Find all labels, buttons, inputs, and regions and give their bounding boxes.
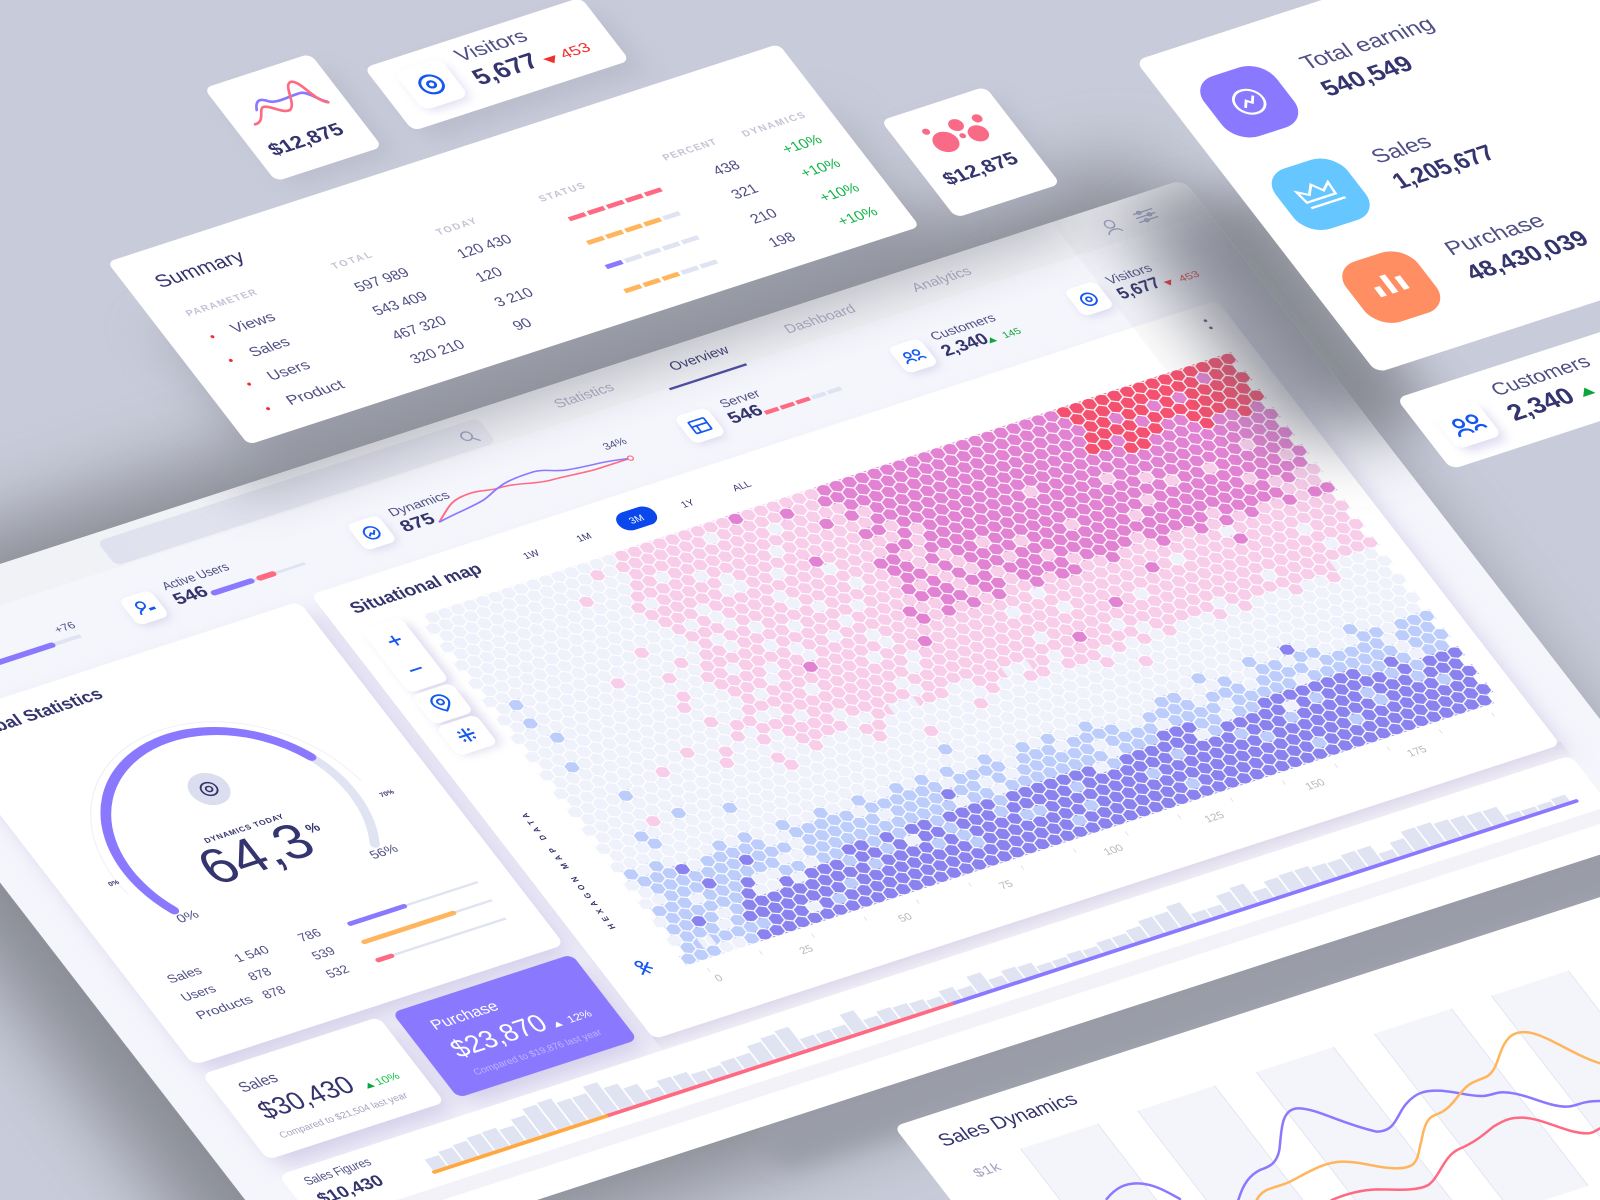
hexagon outlines: [412, 348, 1505, 970]
value: $12,875: [264, 120, 349, 160]
statistics table: 532: [322, 962, 352, 981]
x axis: 100: [1101, 843, 1126, 858]
dynamics column: +10%: [816, 180, 863, 206]
hex layer: pale holes: [617, 376, 1352, 753]
widget: progress stub: +76: [52, 620, 78, 636]
parameter column: Views: [227, 309, 279, 337]
hex layer: magenta holes in red: [1103, 376, 1224, 429]
shadow under top cards: [226, 0, 1073, 392]
table headers: [183, 109, 809, 320]
card: customers: [1396, 246, 1600, 470]
navigation tabs: Statistics: [550, 380, 617, 411]
widget: customers: 145: [1000, 326, 1024, 341]
gauge icon: [179, 768, 239, 810]
visitors icon tile: [401, 62, 472, 113]
change value: 453: [556, 40, 594, 62]
parameter column: [227, 305, 349, 408]
widget: visitors: 453: [1177, 269, 1203, 284]
progress bars: [346, 880, 508, 963]
widget: active users: [115, 539, 313, 629]
total column: [351, 265, 468, 367]
icon: red bubbles: [920, 111, 997, 156]
navigation tabs: [550, 263, 984, 423]
shadows falling on the board: [212, 49, 1408, 512]
y axis label: $1k: [969, 1159, 1005, 1180]
histogram bars: [411, 773, 1570, 1170]
purchase label: Purchase: [1439, 209, 1550, 260]
panel: sales card: Sales: [235, 1071, 282, 1096]
icon: user: [1100, 219, 1123, 235]
icon: eye: [415, 73, 448, 96]
panel: global statistics: [0, 601, 564, 1065]
total column: 467 320: [388, 313, 450, 343]
table headers: STATUS: [537, 181, 589, 204]
x axis: [707, 713, 1504, 984]
statistics table: Sales: [163, 963, 205, 986]
today column: 90: [509, 315, 535, 334]
x axis: 25: [797, 943, 816, 957]
x axis: 150: [1303, 777, 1328, 792]
range selector: 3M: [627, 513, 647, 526]
panel: situational map: [311, 300, 1560, 1039]
hex layer: violet: [643, 605, 1497, 951]
icon: people: [1449, 414, 1487, 437]
hex layer: pink: [477, 357, 1405, 823]
panel: sales card: Compared to $21,504 last year: [277, 1091, 411, 1141]
gauge readout: 70%: [378, 789, 397, 799]
dynamics column: +10%: [779, 132, 826, 157]
widget: customers: [885, 307, 1027, 377]
map controls: [360, 616, 682, 990]
icon: move: [454, 726, 479, 744]
axis label: HEXAGON MAP DATA: [520, 812, 618, 930]
statistics table: Users: [178, 982, 219, 1004]
sales label: Sales: [1366, 130, 1436, 168]
icon: zoom in: [385, 634, 404, 647]
row dots: [210, 335, 271, 411]
panel: purchase card: Compared to $19,876 last year: [471, 1028, 605, 1078]
statistics table: 1 540: [231, 943, 272, 965]
x axis: 50: [896, 911, 915, 925]
statistics table: 878: [259, 983, 289, 1001]
icon: bar tile: [1332, 245, 1451, 329]
panel: sales figures chart: [278, 755, 1600, 1200]
today column: [454, 232, 571, 334]
hex layer: magenta: [698, 357, 1376, 715]
percent column: 438: [709, 158, 744, 179]
navigation tabs: Analytics: [908, 263, 975, 295]
card: visitors: [364, 0, 630, 131]
card: summary table: [107, 44, 920, 445]
visitors value: 5,677: [467, 48, 545, 90]
hex layer: pink holes in magenta: [858, 384, 1327, 605]
range selector: 1M: [574, 531, 594, 544]
card: bubbles value: [881, 87, 1060, 218]
table headers: TODAY: [434, 216, 481, 238]
visitors label: Visitors: [450, 26, 532, 66]
x axis: 0: [712, 973, 726, 984]
parameter column: Product: [283, 377, 349, 408]
gauge readout: %: [302, 819, 324, 836]
panel: sales dynamics: [894, 847, 1600, 1200]
icon: search: [459, 429, 481, 445]
today column: 3 210: [491, 285, 537, 310]
widget: visitors: Visitors: [1102, 261, 1156, 287]
table headers: PARAMETER: [184, 287, 261, 319]
hex layer: blue holes in violet: [805, 659, 1465, 901]
gauge readout: 0%: [173, 907, 202, 925]
search box: [97, 418, 496, 566]
panel shadows on board: [0, 313, 1568, 1172]
total column: 597 989: [351, 265, 413, 295]
table headers: TOTAL: [329, 250, 376, 272]
card: total earning: [1135, 0, 1600, 373]
today column: 120: [472, 264, 506, 286]
more menu dots: [1203, 319, 1213, 330]
total column: 320 210: [407, 337, 468, 367]
today column: 120 430: [454, 232, 516, 262]
icon: wave lines: [255, 82, 328, 124]
table headers: DYNAMICS: [740, 110, 809, 139]
panel: purchase card: Purchase: [427, 999, 502, 1033]
hex layer: blue: [491, 449, 1497, 961]
widget: dynamics: [343, 431, 644, 553]
icon: crown tile: [1261, 152, 1380, 236]
gauge readout: [99, 778, 435, 936]
earning label: Total earning: [1295, 12, 1439, 74]
total column: 543 409: [369, 289, 431, 319]
icon: sliders: [1132, 207, 1159, 224]
user tool tile: [613, 945, 677, 990]
widget: server: [670, 364, 848, 447]
customers value: 2,340: [1500, 382, 1580, 426]
purchase value: 48,430,039: [1460, 226, 1594, 286]
table headers: PERCENT: [661, 137, 721, 163]
customers icon tile: [1439, 405, 1508, 454]
panel: purchase card: [392, 954, 638, 1098]
navigation tabs: Dashboard: [780, 301, 859, 336]
parameter column: Sales: [245, 334, 294, 360]
widget: server: Server: [716, 386, 764, 411]
sparkline: [427, 445, 631, 522]
panel: purchase card: $23,870: [444, 1009, 553, 1063]
gauge readout: DYNAMICS TODAY: [202, 812, 286, 845]
sales figures text: Sales Figures: [300, 1155, 375, 1188]
widget: dynamics: 875: [395, 509, 439, 535]
widget: dynamics: Dynamics: [385, 488, 453, 519]
statistics table: Products: [193, 992, 256, 1022]
range selector: 1W: [521, 548, 543, 562]
panel: sales card: $30,430: [251, 1071, 360, 1124]
range selector: 1Y: [679, 498, 698, 510]
change marker: [543, 55, 560, 65]
icon: pin: [428, 693, 455, 713]
widget: active users: 546: [168, 582, 212, 608]
card: wave value: [204, 54, 382, 182]
status bars: [569, 189, 717, 291]
gauge readout: 64,3: [184, 812, 327, 895]
range selector: [516, 473, 756, 564]
dynamics column: +10%: [834, 204, 881, 229]
statistics table: 539: [308, 944, 338, 963]
navigation tabs: Overview: [665, 342, 733, 373]
parameter column: Users: [264, 358, 314, 384]
dynamics column: [779, 132, 881, 229]
value: $12,875: [938, 149, 1023, 189]
gauge readout: 56%: [366, 841, 401, 862]
percent column: 321: [728, 181, 762, 202]
widget: active users: Active Users: [158, 560, 233, 593]
customers label: Customers: [1487, 352, 1595, 400]
panel: purchase card: 12%: [565, 1008, 595, 1025]
hex layer: red: [1058, 357, 1270, 460]
hex layer: pale base: [420, 357, 1497, 961]
widget: server: 546: [723, 401, 767, 427]
widget: customers: 2,340: [937, 330, 993, 360]
hexagon heatmap: [412, 348, 1505, 970]
widget: progress stub: [0, 620, 84, 705]
dynamics column: +10%: [797, 156, 844, 181]
statistics table: [163, 925, 352, 1023]
widget: dynamics: 34%: [600, 436, 630, 453]
percent column: 198: [765, 230, 799, 251]
panel: sales card: [202, 1017, 445, 1160]
sales value: 1,205,677: [1387, 140, 1501, 194]
statistics table: 878: [245, 965, 274, 983]
widget: visitors: [1061, 250, 1205, 320]
widget: customers: Customers: [927, 311, 999, 343]
percent column: 210: [747, 206, 781, 227]
lavender band between map and chart: [652, 742, 1573, 1053]
earning value: 540,549: [1315, 51, 1419, 101]
gauge: [32, 688, 403, 919]
statistics table: 786: [294, 926, 324, 944]
x axis: 75: [997, 879, 1016, 892]
percent column: [709, 158, 799, 251]
icon: zoom out: [410, 667, 422, 671]
map heading: Situational map: [345, 559, 486, 617]
icon: earning tile: [1190, 60, 1309, 144]
column bars: [1021, 971, 1600, 1200]
gauge readout: 0%: [107, 879, 122, 888]
widget: visitors: 5,677: [1113, 274, 1165, 302]
summary title: Summary: [150, 247, 249, 292]
panel: sales card: 10%: [372, 1071, 403, 1088]
timeline line: [434, 801, 1576, 1172]
x axis: 175: [1405, 744, 1430, 759]
range selector: ALL: [730, 479, 754, 494]
sales dynamics title: Sales Dynamics: [934, 1090, 1082, 1151]
x axis: 125: [1202, 810, 1227, 825]
hex layer: pale holes in lower bands: [651, 633, 1465, 953]
sales dynamics lines: [1107, 1032, 1600, 1200]
icon: user tool: [633, 959, 655, 976]
up marker: [1578, 386, 1596, 397]
